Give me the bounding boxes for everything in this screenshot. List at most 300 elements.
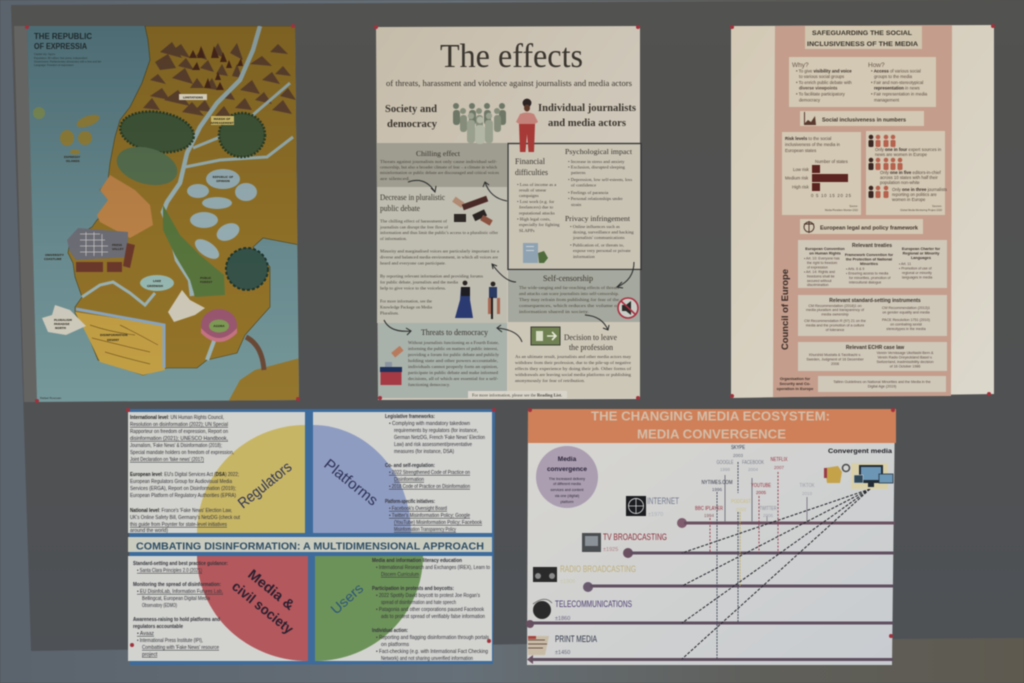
panel: platforms: (YouTube) Misinformation Policy; Facebook	[394, 520, 482, 526]
panel: representation numbers: reporting on politics are	[892, 192, 937, 197]
risk bars	[812, 165, 848, 191]
panel: representation numbers: population non-white	[880, 180, 920, 185]
panel: relevant standard-setting instruments: on combating sexist	[890, 322, 922, 326]
row: internet	[626, 496, 679, 518]
panel: individual impacts frame: • Personal relationships under	[568, 196, 623, 201]
panel: media and civil society: regulators accountable	[133, 624, 183, 630]
icon: journalist and interviewee	[455, 281, 500, 319]
timeline lines	[526, 518, 895, 664]
panel: individual impacts frame: • Online influences such as	[570, 224, 620, 229]
panel: media and civil society: Media &	[245, 566, 298, 613]
arena centre	[209, 320, 229, 332]
panel: relevant standard-setting instruments: on gender equality and media	[882, 310, 930, 314]
footer note	[468, 391, 567, 398]
panel: individual impacts frame: • High legal costs,	[517, 216, 551, 222]
heading: individual journalists	[538, 103, 636, 129]
panel: decision to leave the profession: effects they experience by doing their job. Other forms of	[515, 366, 632, 371]
panel: regulators: Resolution on disinformation (2022); UN Special	[130, 422, 228, 428]
river branches	[185, 83, 293, 167]
panel: relevant ECHR case law: Khurshid Mustafa & Tarzibachi v.	[809, 353, 861, 357]
poster: The changing media ecosystem	[526, 408, 896, 665]
map place names: EXPRESSY	[64, 155, 81, 159]
panel: decrease in pluralistic public debate: For more information, see the	[380, 298, 432, 304]
city blocks	[76, 243, 135, 272]
panel: users: • Patagonia and other corporations paused Facebook	[376, 607, 484, 613]
panel: threats to democracy: individuals cannot properly form an opinion,	[408, 364, 498, 370]
panel: individual impacts frame: SLAPPs	[519, 228, 535, 233]
panel: platforms: • Complying with mandatory takedown	[389, 421, 470, 427]
panel: individual impacts frame: of confidence	[571, 182, 596, 188]
panel: relevant treaties: European Charter for	[902, 247, 941, 251]
panel: why and how: groups to the media	[874, 74, 913, 79]
panel: users: Participation in protests and boycotts:	[372, 586, 454, 592]
western river	[82, 282, 155, 305]
panel: decrease in pluralistic public debate: heard and everyone can participate.	[380, 260, 446, 266]
panel: individual impacts frame: patterns	[571, 170, 586, 175]
panel: threats to democracy: informing the public on matters of public interest,	[408, 346, 498, 352]
panel: self-censorship	[508, 270, 640, 322]
callout: media convergence circle: The increased delivery	[549, 477, 585, 481]
poster: The Republic of Expressia map	[20, 20, 305, 405]
panel: users: Users	[327, 580, 366, 617]
event labels: 2003	[736, 507, 747, 512]
event labels: 2004	[748, 467, 759, 472]
panel: relevant standard-setting instruments: Relevant standard-setting instruments	[829, 298, 921, 304]
panel: platforms: Platform-specific initiatives:	[385, 499, 435, 505]
arrows between sections	[384, 180, 634, 342]
panel: decrease in pluralistic public debate: Decrease in pluralistic	[380, 193, 445, 202]
panel: risk levels chart: Number of states	[815, 159, 848, 164]
panel: individual impacts frame: reputational attacks	[519, 210, 555, 216]
map title	[34, 32, 92, 51]
map place names: Rafael Ruscoan	[40, 396, 62, 400]
panel: decrease in pluralistic public debate	[377, 187, 507, 323]
panel: platforms: Co- and self-regulation:	[385, 463, 435, 469]
map place names: PRESS	[112, 243, 122, 247]
panel: individual impacts frame	[508, 144, 641, 270]
panel: relevant ECHR case law: of 16 October 1986	[890, 364, 920, 368]
panel: why and how: How?	[868, 62, 885, 69]
panel: relevant standard-setting instruments: PACE Resolution 1751 (2010)	[882, 318, 930, 322]
round forest	[226, 248, 268, 290]
event labels: SKYPE	[731, 445, 746, 451]
map place names: PLURALISM	[54, 318, 72, 322]
panel: media and civil society: • Santa Clara Principles 2.0 (2021)	[137, 568, 202, 574]
panel: Tallinn guidelines: Digital Age (2019)	[868, 384, 896, 388]
map south-east land	[228, 358, 300, 402]
label: OSCE: Security and Co-	[780, 381, 811, 386]
panel: risk levels chart: Risk levels to the social	[785, 136, 831, 141]
panel: platforms: • Facebook's Oversight Board	[389, 506, 447, 512]
panel: individual impacts frame: • Feelings of paranoia	[568, 190, 608, 195]
panel: representation numbers: Sources:	[932, 205, 942, 208]
panel: users: • Reporting and flagging disinformation through portals	[376, 635, 489, 641]
panel: decrease in pluralistic public debate: Knowledge Package on Media	[380, 304, 432, 310]
grey city	[67, 228, 128, 260]
panel: risk levels chart: Low risk	[793, 167, 810, 172]
event labels: GOOGLE	[716, 460, 734, 466]
event labels: 2019	[802, 491, 813, 496]
panel: regulators: European Platform of Regulatory Authorities (EPRA)	[130, 493, 236, 499]
panel: individual impacts frame: • Depression, low self-esteem, loss	[568, 177, 632, 183]
heading: individual journalists: and media actors	[548, 118, 626, 129]
panel: media and civil society: civil society	[229, 578, 297, 637]
panel: decision to leave the profession: As an ultimate result, journalists and other media actors may	[515, 354, 632, 360]
panel: individual impacts frame: campaigns	[519, 193, 539, 198]
panel: decrease in pluralistic public debate: diverse and balanced media environment, in which all voices are	[380, 254, 498, 260]
islands	[33, 107, 101, 154]
map place names: COASTLINE	[44, 257, 62, 261]
panel: relevant standard-setting instruments: stereotypes in the media	[886, 327, 926, 331]
panel: individual impacts frame: • Exclusion, disrupted sleeping	[568, 164, 626, 170]
heading: individual journalists: Individual journalists	[538, 103, 636, 114]
event labels: 1998	[720, 467, 731, 472]
panel: chilling effect: Threats against journalists not only cause individual self-	[380, 159, 498, 164]
panel: representation numbers: Only one in three journalists	[892, 187, 947, 192]
panel: why and how: • Fair and non-stereotypical	[871, 80, 923, 85]
panel: individual impacts frame: freelancers) due to	[519, 204, 554, 210]
event labels: 2003	[733, 453, 744, 458]
event markers	[710, 462, 807, 659]
map place names: AGORA	[213, 324, 225, 328]
map place names: DESERT	[107, 338, 119, 342]
panel: risk levels chart	[782, 132, 861, 215]
label: OSCE: operation in Europe	[777, 386, 814, 391]
panel: individual impacts frame: strain	[571, 202, 582, 207]
bridge	[246, 337, 264, 370]
row: telecommunications: ±1860	[555, 616, 570, 622]
panel: regulators: Services (ERGA), Report on Disinformation (2019);	[130, 486, 236, 492]
row: telecommunications	[533, 599, 632, 622]
panel: media and civil society: • Avaaz	[137, 631, 154, 637]
row: print media: ±1450	[555, 650, 570, 656]
panel: individual impacts frame: difficulties	[515, 168, 548, 177]
panel: self-censorship: and attacks can scare journalists into self-censorship.	[519, 291, 619, 296]
panel: individual impacts frame: • Increase in stress and anxiety	[568, 159, 625, 164]
panel: risk levels chart: High risk	[792, 184, 810, 190]
panel: why and how: representation in news	[874, 86, 920, 90]
panel: relevant standard-setting instruments: media pluralism and transparency of	[806, 308, 864, 312]
icon: broken handshake	[452, 196, 493, 226]
row: internet: ±1970	[648, 512, 663, 518]
panel: regulators	[127, 411, 306, 534]
panel: platforms: German NetzDG, French 'Fake News' Election	[394, 435, 485, 441]
panel: individual impacts frame: expose very personal or private	[573, 248, 631, 253]
panel: relevant treaties: • Art. 14: Rights and	[804, 270, 835, 274]
panel: relevant ECHR case law: Sweden, Judgment of 16 December	[806, 358, 864, 362]
panel: why and how: management	[874, 98, 900, 102]
icon: muted speaker	[618, 298, 638, 318]
callout: media convergence circle: Media	[558, 456, 577, 463]
row: print media	[528, 634, 597, 656]
panel: individual impacts frame: • Publication of, or threats to,	[570, 242, 624, 248]
panel: individual impacts frame: doxing, surveillance and hacking	[573, 230, 634, 236]
map place names: ISLANDS	[66, 159, 80, 163]
panel: users: Network) and not sharing unverified information	[381, 656, 473, 662]
panel: relevant treaties: • Ensuring access to media	[846, 272, 888, 276]
map place names: PARADISE	[54, 322, 70, 326]
panel: relevant treaties: freedoms shall be	[807, 274, 835, 278]
panel: relevant standard-setting instruments: CM Recommendation (2013)1	[882, 306, 930, 310]
panel: platforms: Law) and risk assessment/preventative	[394, 442, 472, 448]
panel: individual impacts frame: result of smear	[519, 188, 547, 192]
panel: relevant standard-setting instruments	[798, 295, 947, 336]
mountains	[143, 42, 296, 118]
panel: regulators: International level: UN Human Rights Council,	[130, 415, 224, 421]
fir trees	[189, 46, 243, 90]
icon: exit sign	[531, 327, 560, 345]
panel: decrease in pluralistic public debate: Pluralism.	[380, 310, 399, 316]
row: TV broadcasting: TV BROADCASTING	[603, 532, 667, 542]
panel: relevant ECHR case law: Verein Vernissage Ukeltasbi Bern &	[877, 351, 934, 355]
panel: users: • Fact-checking (e.g. with International Fact Checking	[376, 649, 488, 655]
panel: platforms	[312, 411, 493, 534]
map place names: OPINION	[216, 179, 230, 183]
dashed convergence lines	[682, 489, 870, 659]
panel: self-censorship: The wide-ranging and far-reaching effects of threats	[519, 285, 619, 290]
event labels: 2006	[763, 513, 774, 518]
icon: ballot box	[380, 346, 404, 385]
panel: representation numbers: Only one in four expert sources in	[875, 147, 942, 152]
label: OSCE: Organisation for	[780, 376, 811, 381]
panel: relevant treaties: Languages	[911, 256, 931, 260]
green plains	[116, 146, 178, 186]
callout: media convergence circle: via one (digital)	[555, 494, 579, 498]
freedom clouds	[42, 305, 86, 335]
panel: individual impacts frame: • Lost work (e.g. for	[517, 199, 555, 204]
panel: why and how: • To facilitate participatory	[796, 92, 846, 96]
title band	[528, 408, 896, 443]
event labels	[695, 445, 815, 518]
panel: chilling effect: misinformation or public debate are discouraged and critical voices	[380, 170, 499, 175]
panel: threats to democracy: participate in public debate and make informed	[408, 370, 499, 375]
title band: MEDIA CONVERGENCE	[637, 426, 786, 442]
panel: regulators: UK's Online Safety Bill, Germany's NetzDG (check out	[130, 515, 241, 521]
panel: why and how: Why?	[792, 62, 809, 69]
panel: relevant ECHR case law: Relevant ECHR case law	[846, 345, 904, 351]
map legend text: Government: Parliamentary democracy with a free and fair	[34, 60, 101, 64]
icon row: one in four	[868, 135, 896, 147]
map place names: REPUBLIC OF	[213, 175, 233, 179]
vertical label: Council of Europe: Council of Europe	[780, 269, 791, 350]
map place names: VALLEY	[112, 247, 125, 251]
panel: relevant treaties: the right to freedom	[807, 261, 837, 265]
panel: regulators: European level: EU's Digital Services Act (DSA) 2022;	[130, 472, 239, 478]
panel: decrease in pluralistic public debate: of information.	[380, 236, 407, 241]
panel: representation numbers: Global Media Monitoring Project 2020	[900, 209, 943, 212]
panel: why and how: • To give visibility and voice	[796, 68, 852, 74]
panel: regulators: National level: France's 'Fake News' Election Law,	[130, 508, 232, 514]
delta river	[207, 341, 214, 360]
panel: platforms: • 2018 Code of Practice on Disinformation	[389, 484, 470, 490]
panel: individual impacts frame: • Loss of income as a	[517, 182, 556, 187]
panel: risk levels chart: Media Pluralism Monitor 2022	[825, 209, 859, 212]
panel: why and how	[789, 57, 936, 107]
panel: relevant treaties: intercultural dialogue	[849, 280, 881, 284]
panel: relevant standard-setting instruments: media and the promotion of a culture	[806, 324, 864, 328]
panel: relevant treaties: Relevant treaties	[852, 243, 892, 249]
map title: THE REPUBLIC	[34, 32, 92, 41]
panel: Tallinn guidelines	[818, 376, 946, 392]
north-east forest	[219, 113, 265, 157]
panel: why and how: • Access of various social	[871, 68, 921, 74]
panel: self-censorship: Self-censorship	[543, 274, 593, 283]
panel: users: Media and information literacy education	[372, 558, 462, 564]
panel: platforms: Disinformation	[394, 477, 424, 483]
icon: documents	[523, 243, 548, 263]
event labels: YOUTUBE	[751, 483, 772, 489]
row: radio broadcasting	[533, 564, 636, 585]
panel: risk levels chart: inclusiveness of the media in	[785, 142, 841, 147]
central pink column	[773, 25, 952, 397]
panel: platforms: Platforms	[320, 456, 381, 509]
panel: relevant standard-setting instruments: CM Recommendation (2018)1 on	[808, 304, 862, 308]
dark forest	[118, 110, 196, 154]
panel: media and civil society: Monitoring the spread of disinformation:	[133, 582, 221, 588]
panel: decrease in pluralistic public debate: The chilling effect of harassment of	[380, 218, 447, 224]
title box: INCLUSIVENESS OF THE MEDIA	[807, 41, 919, 48]
section bar: social inclusiveness in numbers	[800, 111, 924, 126]
river of information	[163, 26, 260, 296]
panel: relevant treaties: Minorities	[860, 262, 878, 266]
panel: platforms: Legislative frameworks:	[385, 414, 435, 420]
map place names	[40, 94, 234, 400]
panel: relevant treaties: Regional or Minority	[903, 252, 940, 256]
icon: devices	[851, 463, 893, 489]
arena	[201, 309, 237, 341]
panel: media and civil society: Combatting with 'Fake News' resource	[142, 645, 219, 651]
callout: media convergence circle: services and content	[551, 488, 583, 492]
row: TV broadcasting: ±1925	[603, 547, 618, 553]
panel: relevant treaties: for minorities, promotion of	[849, 276, 890, 280]
panel: representation numbers: women in Europe	[892, 197, 926, 202]
event labels: BBC IPLAYER	[695, 506, 723, 512]
panel: users	[314, 555, 493, 662]
panel: representation numbers: Only one in five editors-in-chief	[880, 170, 941, 175]
panel: representation numbers	[866, 131, 947, 215]
panel: relevant treaties: regional or minority	[902, 271, 932, 275]
panel: media and civil society: • International Press Institute (IPI),	[137, 638, 203, 644]
panel: decrease in pluralistic public debate: help to give voice to the voiceless.	[380, 286, 446, 290]
panel: decrease in pluralistic public debate: information and thus limit the public's access to a pluralistic offer	[380, 230, 498, 235]
panel: regulators: Joint Declaration on 'fake news' (2017)	[130, 457, 204, 463]
panel: users: spread of disinformation and hate speech	[381, 600, 456, 606]
panel: relevant treaties: • Promotion of use of	[899, 266, 932, 270]
panel: representation numbers: across 10 states with half their	[880, 175, 938, 180]
banner title	[128, 537, 492, 552]
panel: chilling effect: Chilling effect	[416, 150, 460, 158]
map place names: PUBLIC	[200, 276, 211, 280]
panel: threats to democracy	[378, 323, 507, 398]
map place names: LIMITATIONS	[183, 96, 203, 100]
row: telecommunications: TELECOMMUNICATIONS	[555, 599, 632, 609]
panel: platforms: • Twitter's Misinformation Policy; Google	[389, 513, 470, 519]
footer note: For more information, please see the Reading List.	[472, 392, 562, 398]
panel: users: ads to protest spread of verifiably false information	[381, 614, 485, 620]
panel: platforms: • 2022 Strengthened Code of Practice on	[389, 470, 470, 476]
title box	[805, 26, 922, 49]
event labels: TIKTOK	[800, 483, 815, 489]
icon: media bundle	[824, 464, 850, 483]
panel: relevant standard-setting instruments: CM Recommendation R (97) 21 on the	[804, 319, 866, 323]
map place names: UNIVERSITY	[45, 253, 65, 257]
panel: representation numbers: news are women in Europe	[875, 152, 928, 157]
panel: individual impacts frame: information	[573, 254, 595, 259]
map legend text	[34, 52, 101, 67]
panel: platforms: Misinformation Transparency Policy	[394, 527, 456, 533]
panel: regulators: this guide from Poynter for state-level initiatives	[130, 522, 227, 528]
section bar: legal framework: European legal and policy framework	[820, 226, 918, 232]
panel: users: Discern Curriculum	[381, 572, 419, 578]
event labels: NYTIMES.COM	[702, 480, 732, 486]
panel: why and how: • To enrich public debate with	[796, 80, 852, 85]
panel: chilling effect	[377, 143, 507, 187]
map place names: DISINFORMATION	[100, 333, 128, 337]
map title: OF EXPRESSIA	[34, 42, 87, 51]
map place names: FOREST	[200, 280, 212, 284]
panel: relevant standard-setting instruments: of tolerance	[826, 328, 844, 332]
title: The effects	[440, 38, 583, 75]
heading: society and democracy	[385, 104, 438, 130]
event labels: PODCAST	[731, 499, 751, 505]
row: print media: PRINT MEDIA	[555, 634, 597, 644]
panel: relevant treaties: of expression	[807, 266, 828, 270]
icon: crowd of people	[453, 103, 506, 144]
panel: users: • International Research and Exchanges (IREX), Learn to	[376, 565, 490, 571]
panel: risk levels chart: Source:	[849, 205, 858, 208]
panel: decision to leave the profession: anonymously for fear of retribution.	[515, 378, 585, 383]
row: TV broadcasting	[582, 532, 667, 553]
desert	[75, 312, 165, 375]
panel: platforms: requirements by regulators (for instance,	[394, 428, 478, 434]
panel: decision to leave the profession: the profession	[569, 343, 613, 352]
panel: media and civil society: • EU DisinfoLab, Information Futures Lab,	[137, 589, 223, 595]
panel: relevant treaties: • Arts. 6 & 9	[846, 267, 864, 271]
icon row: one in five	[868, 158, 902, 170]
map place names: GREENISH	[147, 284, 164, 288]
subtitle: of threats, harassment and violence against journalists and media actors	[386, 79, 632, 88]
green valley	[163, 205, 225, 297]
section bar: legal framework	[800, 219, 923, 234]
panel: regulators: Rapporteur on freedom of expression, Report on	[130, 429, 228, 435]
panel: threats to democracy: holding state and other powers accountable,	[408, 358, 498, 364]
map place names: MARSH OF	[214, 117, 230, 121]
panel: decrease in pluralistic public debate: By reporting relevant information and providing forums	[380, 274, 483, 278]
panel: risk levels chart: 0 5 10 15 20 25	[811, 193, 852, 198]
event labels: TWITTER	[760, 506, 777, 512]
desert dunes	[90, 325, 158, 364]
panel: decrease in pluralistic public debate: public debate	[380, 204, 420, 213]
panel: relevant treaties: secured without	[807, 279, 832, 283]
desert wall	[76, 309, 164, 368]
convergent media label: Convergent media	[828, 448, 892, 455]
panel: users: on platforms	[381, 642, 409, 648]
panel: why and how: democracy	[799, 98, 821, 102]
lake greenish	[140, 275, 174, 291]
callout: media convergence circle: of different media	[553, 482, 581, 486]
panel: threats to democracy: functioning democracy.	[408, 382, 450, 387]
arena lower wall	[201, 328, 237, 342]
panel: relevant ECHR case law: Switzerland, inadmissibility decision	[877, 360, 933, 364]
panel: relevant ECHR case law: 2008	[831, 362, 839, 366]
poster: The effects	[376, 26, 641, 400]
map place names: APPEASEMENT	[210, 121, 234, 125]
panel: regulators: European Regulators Group for Audiovisual Media	[130, 479, 232, 485]
callout: media convergence circle: convergence	[547, 466, 587, 473]
panel: relevant treaties: on Human Rights	[809, 252, 841, 256]
panel: risk levels chart: European states	[785, 148, 816, 153]
panel: why and how: • Fair representation in media	[871, 92, 928, 96]
